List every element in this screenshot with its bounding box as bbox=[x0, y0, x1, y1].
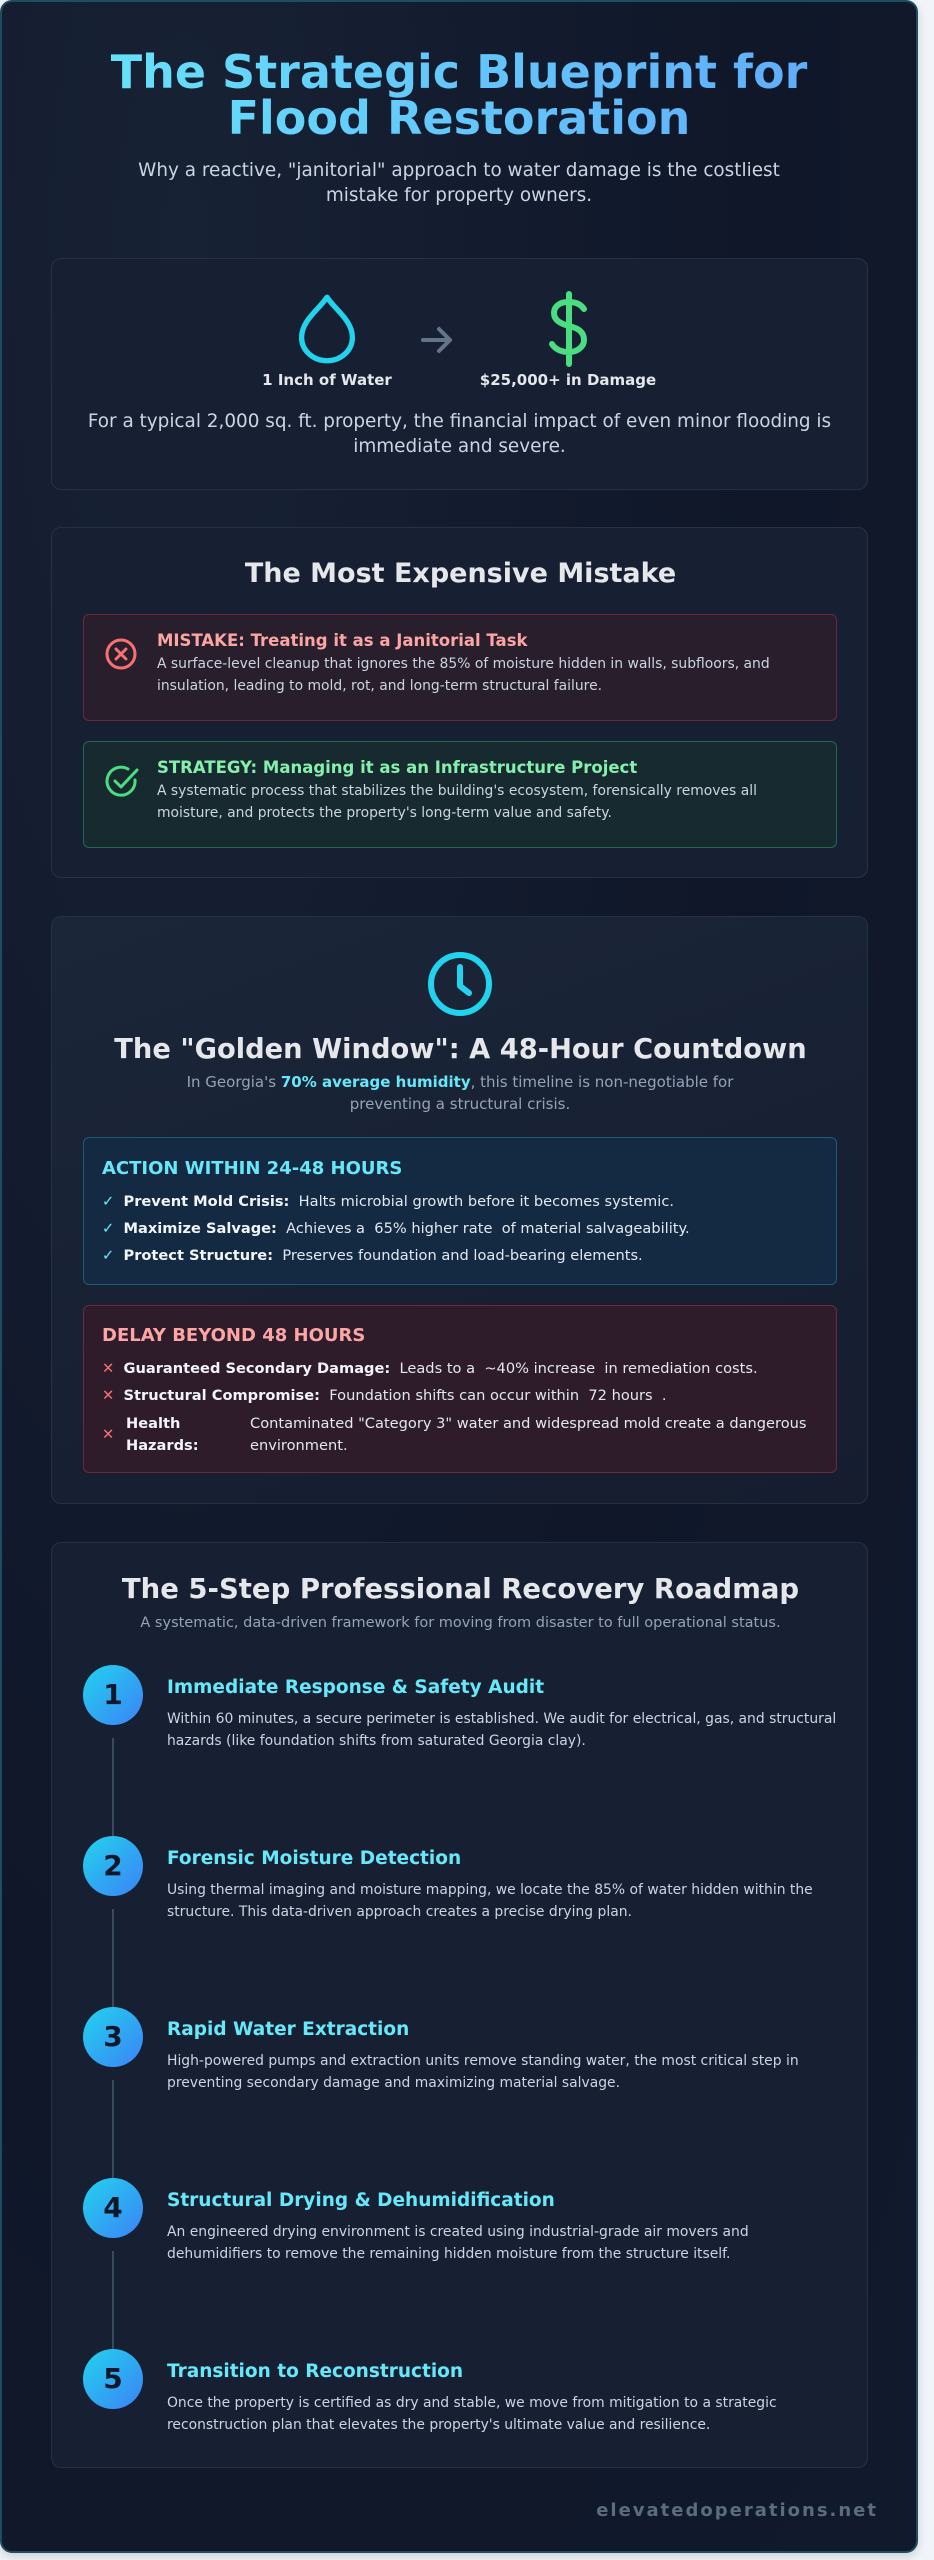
step 1 bbox=[83, 1665, 836, 1749]
delay box: Health Hazards: bbox=[126, 1415, 199, 1454]
impact text: For a typical 2,000 sq. ft. property, the financial impact of even minor flooding is immediate and severe. bbox=[88, 411, 831, 457]
subtext: A systematic, data-driven framework for moving from disaster to full operational status. bbox=[140, 1615, 781, 1631]
strategy text bbox=[157, 758, 757, 821]
panel: most expensive mistake bbox=[51, 527, 868, 878]
title bbox=[110, 45, 808, 145]
heading: The 5-Step Professional Recovery Roadmap bbox=[122, 1573, 799, 1605]
strategy text: A systematic process that stabilizes the building's ecosystem, forensically removes all moisture, and protects the property's long-term value and safety. bbox=[157, 783, 757, 821]
step 4: 4 bbox=[103, 2191, 123, 2224]
panel: cost impact bbox=[51, 258, 868, 490]
icon: water drop bbox=[298, 294, 356, 364]
step 4: Structural Drying & Dehumidification bbox=[167, 2190, 555, 2211]
icon: dollar bbox=[549, 291, 587, 367]
step 2: Forensic Moisture Detection bbox=[167, 1848, 461, 1869]
action items: ✓ Prevent Mold Crisis: Halts microbial growth before it becomes systemic. bbox=[102, 1193, 674, 1210]
step 3: Rapid Water Extraction bbox=[167, 2019, 409, 2040]
step 4 bbox=[83, 2178, 749, 2262]
step 3 bbox=[83, 2007, 799, 2091]
icon: x circle bbox=[106, 638, 136, 670]
action title: ACTION WITHIN 24-48 HOURS bbox=[102, 1158, 402, 1179]
label: water: 1 Inch of Water bbox=[262, 371, 392, 389]
mistake text: A surface-level cleanup that ignores the 85% of moisture hidden in walls, subfloors, and insulation, leading to mold, rot, and long-term structural failure. bbox=[157, 656, 770, 694]
step 3: 3 bbox=[103, 2020, 123, 2053]
strategy text: STRATEGY: Managing it as an Infrastructure Project bbox=[157, 758, 637, 777]
title: Flood Restoration bbox=[228, 91, 690, 145]
panel: roadmap bbox=[51, 1542, 868, 2468]
label: damage: $25,000+ in Damage bbox=[480, 371, 656, 389]
footer: elevatedoperations.net bbox=[596, 2500, 878, 2521]
action box bbox=[83, 1137, 837, 1285]
step 2: Using thermal imaging and moisture mapping, we locate the 85% of water hidden within the structure. This data-driven approach creates a precise drying plan. bbox=[167, 1882, 813, 1920]
step 5: Transition to Reconstruction bbox=[167, 2361, 463, 2382]
step 4: An engineered drying environment is created using industrial-grade air movers and dehumidifiers to remove the remaining hidden moisture from the structure itself. bbox=[167, 2224, 749, 2262]
step 5: Once the property is certified as dry and stable, we move from mitigation to a strategic reconstruction plan that elevates the property's ultimate value and resilience. bbox=[167, 2395, 777, 2433]
heading: The "Golden Window": A 48-Hour Countdown bbox=[114, 1034, 807, 1065]
strategy box bbox=[83, 741, 837, 848]
mistake box bbox=[83, 614, 837, 721]
delay box: ✕ bbox=[102, 1426, 114, 1443]
heading: The Most Expensive Mistake bbox=[245, 558, 676, 589]
step 2: 2 bbox=[103, 1849, 123, 1882]
panel: golden window bbox=[51, 916, 868, 1504]
icon: check circle bbox=[106, 766, 139, 797]
subtitle: Why a reactive, "janitorial" approach to water damage is the costliest mistake for property owners. bbox=[138, 160, 780, 206]
icon: clock bbox=[428, 952, 492, 1016]
mistake text bbox=[157, 631, 770, 694]
delay box bbox=[83, 1305, 837, 1473]
action box: ✓ Maximize Salvage: Achieves a 65% higher rate of material salvageability. bbox=[102, 1220, 690, 1237]
action box: ✓ Protect Structure: Preserves foundation and load-bearing elements. bbox=[102, 1247, 643, 1264]
icon: arrow bbox=[421, 326, 452, 353]
title: The Strategic Blueprint for bbox=[111, 45, 807, 99]
delay box: Contaminated "Category 3" water and widespread mold create a dangerous environment. bbox=[250, 1415, 806, 1454]
step 3: High-powered pumps and extraction units remove standing water, the most critical step in preventing secondary damage and maximizing material salvage. bbox=[167, 2053, 799, 2091]
step 5 bbox=[83, 2349, 777, 2433]
step 1: Immediate Response & Safety Audit bbox=[167, 1677, 544, 1698]
mistake text: MISTAKE: Treating it as a Janitorial Task bbox=[157, 631, 528, 650]
delay title: DELAY BEYOND 48 HOURS bbox=[102, 1325, 365, 1346]
step 1: Within 60 minutes, a secure perimeter is established. We audit for electrical, gas, and structural hazards (like foundation shifts from saturated Georgia clay). bbox=[167, 1711, 836, 1749]
delay box: ✕ Structural Compromise: Foundation shifts can occur within 72 hours . bbox=[102, 1387, 667, 1404]
step 2 bbox=[83, 1836, 813, 1920]
delay items: ✕ Guaranteed Secondary Damage: Leads to a ~40% increase in remediation costs. bbox=[102, 1360, 758, 1377]
subtext: In Georgia's 70% average humidity, this timeline is non‑negotiable for preventing a structural crisis. bbox=[187, 1073, 733, 1113]
step 1: 1 bbox=[103, 1678, 123, 1711]
step 5: 5 bbox=[103, 2362, 123, 2395]
